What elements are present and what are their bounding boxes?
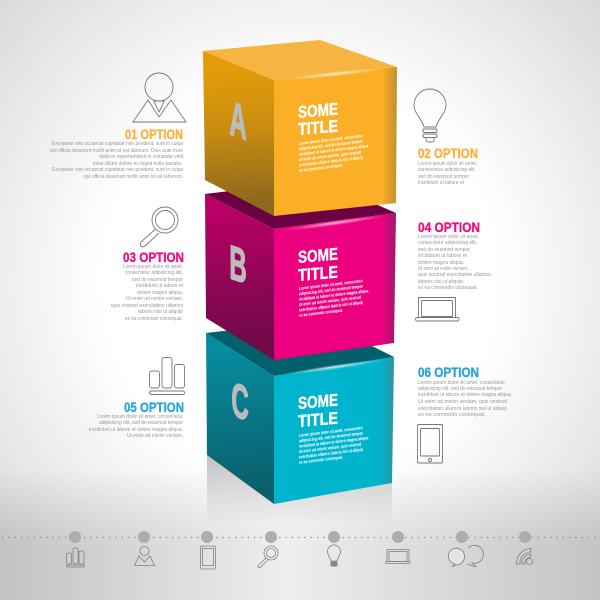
icon: magnifier	[140, 207, 178, 247]
cube C text: incididunt ut labore et dolore magna aliqua.	[299, 435, 369, 449]
option 05: incididunt ut labore et dolore magna aliqua.	[89, 427, 183, 433]
option 03: ex ea commodo consequat.	[125, 316, 183, 322]
timeline icon: bar chart	[66, 548, 84, 567]
timeline	[2, 531, 600, 543]
option 03: Lorem ipsum dolor sit amet,	[123, 264, 183, 270]
option 01: esse cillum dolore eu fugiat nulla pariatur.	[93, 161, 183, 167]
option 02	[418, 146, 478, 186]
cube C text	[299, 424, 369, 465]
cube B text: exercitation ullamco laboris nisi ut aliquip	[299, 300, 363, 313]
cube B text: ex ea commodo consequat.	[299, 308, 343, 318]
cube A text: incididunt ut labore et dolore magna aliqua.	[299, 143, 369, 157]
option 06: exercitation ullamco laboris nisi ut aliquip	[418, 406, 507, 412]
cube A text: Lorem ipsum dolor sit amet, consectetur	[299, 133, 363, 146]
cube C title: TITLE	[298, 409, 338, 431]
option 04: consectetur adipisicing elit,	[418, 240, 477, 246]
cube B text: adipisicing elit, sed do eiusmod tempor	[299, 284, 363, 296]
option 04: 04 OPTION	[418, 220, 480, 235]
timeline icon: person	[134, 546, 154, 566]
option 01: 01 OPTION	[125, 127, 183, 142]
option 03: consectetur adipisicing elit,	[125, 270, 183, 276]
cube A title: TITLE	[298, 117, 338, 139]
option 02: sed do eiusmod tempor	[418, 174, 469, 180]
cube C text: Lorem ipsum dolor sit amet, consectetur	[299, 425, 363, 438]
cube C title: SOME	[298, 391, 338, 413]
option 04: ex ea commodo consequat.	[418, 285, 478, 291]
option 05: Lorem ipsum dolor sit amet, consectetur	[97, 414, 183, 420]
cube C	[206, 320, 394, 504]
option 03: sed do eiusmod tempor	[132, 277, 183, 283]
option 04: Lorem ipsum dolor sit amet,	[418, 234, 479, 240]
option 03: Ut enim ad minim veniam,	[126, 296, 183, 302]
cube B text: Ut enim ad minim veniam, quis nostrud	[299, 295, 361, 307]
option 02: consectetur adipisicing elit,	[418, 167, 476, 173]
icon: tablet	[418, 424, 442, 463]
option 04: quis nostrud exercitation ullamco	[418, 272, 491, 278]
option 06: adipisicing elit, sed do eiusmod tempor	[418, 386, 502, 392]
option 04: laboris nisi ut aliquip	[418, 279, 463, 285]
option 03: laboris nisi ut aliquip	[138, 309, 183, 315]
cube A	[203, 40, 397, 216]
timeline icon: light bulb	[328, 545, 340, 566]
option 05: adipisicing elit, sed do eiusmod tempor	[99, 420, 183, 426]
cube C text: adipisicing elit, sed do eiusmod tempor	[299, 431, 363, 443]
cube B title: SOME	[298, 245, 338, 267]
letter C: C	[231, 373, 249, 432]
cube C title	[298, 391, 338, 431]
cube A title: SOME	[298, 100, 338, 122]
cube A text: ex ea commodo consequat.	[299, 163, 343, 173]
cube A text: exercitation ullamco laboris nisi ut aliquip	[299, 155, 363, 168]
cube B text	[299, 277, 369, 318]
option 02: Lorem ipsum dolor sit amet,	[418, 161, 477, 167]
option 03: dolore magna aliqua.	[137, 290, 183, 296]
icon: light bulb	[414, 89, 446, 142]
cube A text: Ut enim ad minim veniam, quis nostrud	[299, 150, 361, 162]
option 06: 06 OPTION	[418, 365, 479, 380]
option 05	[89, 400, 184, 439]
option 03: incididunt ut labore et	[136, 283, 184, 289]
option 06: Lorem ipsum dolor sit amet, consectetur	[418, 380, 505, 386]
letter A: A	[229, 92, 247, 151]
icon: bar chart	[150, 358, 184, 394]
option 04	[418, 220, 491, 291]
timeline icon: tablet	[200, 546, 216, 569]
option 01: qui officia deserunt mollit anim id est laborum.	[84, 174, 183, 180]
option 05: Ut enim ad minim veniam,	[127, 433, 183, 439]
icon: laptop	[416, 298, 459, 321]
cube B	[205, 180, 396, 360]
cube B text: incididunt ut labore et dolore magna aliqua.	[299, 288, 369, 302]
cube B text: Lorem ipsum dolor sit amet, consectetur	[299, 278, 363, 291]
option 04: dolore magna aliqua.	[418, 260, 464, 266]
cube A text: adipisicing elit, sed do eiusmod tempor	[299, 139, 363, 151]
timeline icon: wifi	[516, 548, 532, 564]
option 04: sed do eiusmod tempor	[418, 247, 470, 253]
cube C text: exercitation ullamco laboris nisi ut aliquip	[299, 447, 363, 460]
timeline icon: laptop	[386, 550, 410, 564]
option 04: incididunt ut labore et	[418, 253, 468, 259]
cube C text: Ut enim ad minim veniam, quis nostrud	[299, 442, 361, 454]
option 01	[50, 127, 184, 180]
timeline icon: magnifier	[258, 546, 278, 568]
option 06	[418, 365, 512, 418]
option 03: quis nostrud exercitation ullamco	[111, 303, 183, 309]
letter B: B	[229, 236, 247, 295]
cube A text	[299, 132, 369, 173]
option 02: incididunt ut labore et	[418, 180, 465, 186]
option 05: 05 OPTION	[124, 400, 184, 415]
option 01: Excepteur sint occaecat cupidatat non proident, sunt in culpa	[52, 167, 183, 173]
option 02: 02 OPTION	[418, 146, 478, 161]
option 06: ex ea commodo consequat.	[418, 412, 486, 418]
option 04: Ut enim ad minim veniam,	[418, 266, 468, 272]
option 01: dolor in reprehenderit in voluptate velit	[99, 154, 184, 160]
cube B title	[298, 245, 338, 285]
cube C text: ex ea commodo consequat.	[299, 455, 343, 465]
timeline icon: speech bubbles	[448, 545, 483, 567]
cube A title	[298, 100, 338, 139]
option 01: Excepteur sint occaecat cupidatat non proident, sunt in culpa	[52, 141, 183, 147]
option 01: qui officia deserunt mollit anim id est laborum. Duis aute irure	[50, 148, 183, 154]
option 03	[111, 250, 184, 322]
icon: person	[133, 73, 186, 122]
cube reflection	[207, 455, 392, 530]
option 03: 03 OPTION	[123, 250, 184, 265]
option 06: Ut enim ad minim veniam, quis nostrud	[418, 399, 507, 405]
option 06: incididunt ut labore et dolore magna aliqua.	[418, 392, 512, 398]
cube B title: TITLE	[298, 263, 338, 285]
